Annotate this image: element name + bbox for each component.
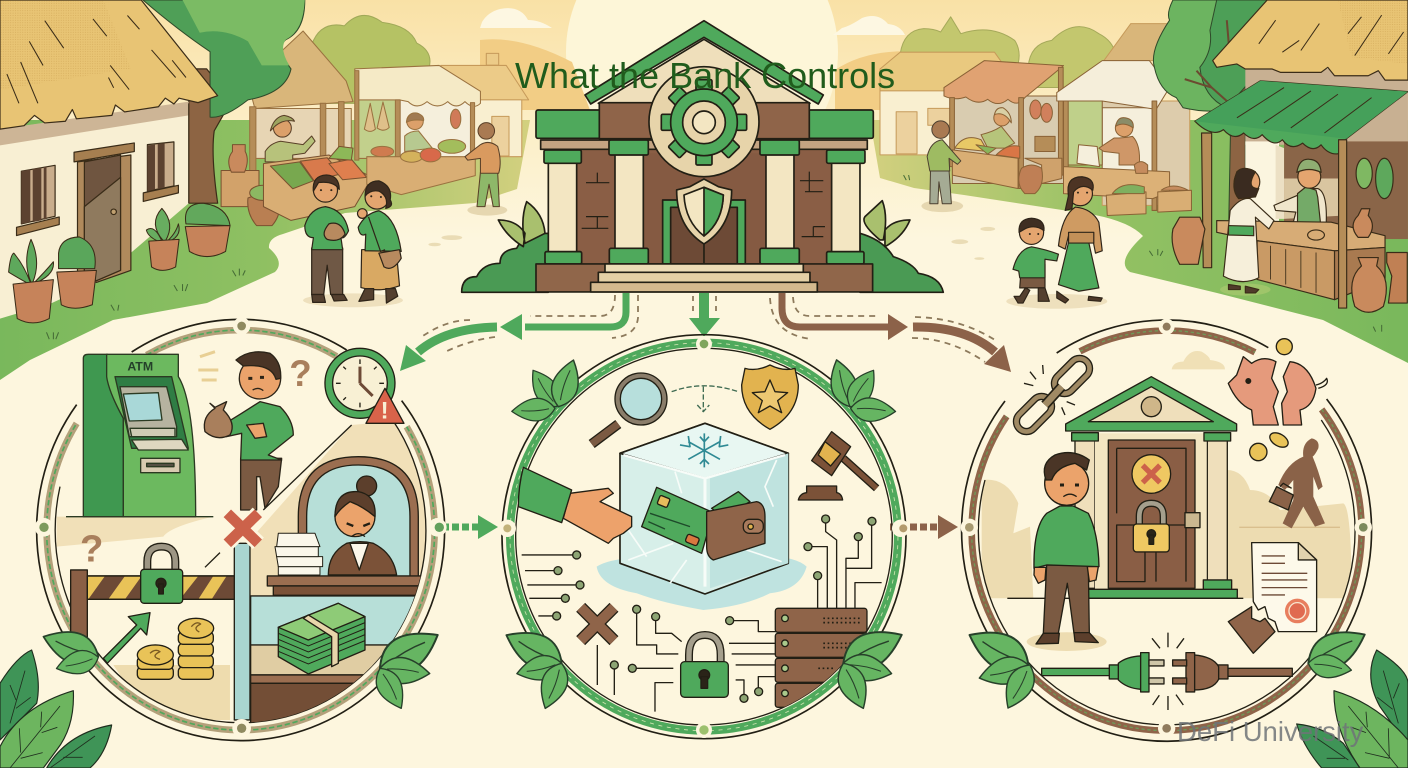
right village [880, 0, 1408, 332]
leaves bottom left [0, 650, 112, 768]
grass tufts right [904, 175, 1382, 332]
arrow: bank to centre panel [689, 293, 720, 337]
bushes and leaves [462, 201, 943, 292]
growth arrow [103, 613, 150, 663]
left tree trunk [189, 69, 245, 203]
clock with warning: ! [381, 397, 389, 424]
walking silhouette [1278, 438, 1325, 528]
panel 2 frame [502, 335, 906, 739]
leaves bottom right [1297, 650, 1408, 768]
pediment [598, 39, 810, 103]
walls and frieze [577, 148, 833, 265]
path pebbles left [428, 235, 462, 246]
distant trees right [900, 17, 1116, 88]
column capitals and bases [544, 140, 865, 264]
lawn right [870, 120, 1408, 363]
bank card [642, 487, 713, 553]
vendor in green vest [1274, 189, 1326, 226]
panel 2 leaves [499, 356, 909, 714]
panel 3 backdrop [982, 470, 1352, 598]
gear medallion [649, 67, 759, 177]
dashed pointer [672, 386, 738, 412]
briefcase [1269, 483, 1293, 510]
arrow: left panel to centre panel [432, 515, 498, 539]
lawn left [0, 120, 530, 380]
tree canopy left [143, 0, 305, 117]
left house [0, 0, 218, 319]
panel 3 nodes [961, 319, 1372, 737]
padlock [681, 635, 728, 697]
family walking [1006, 177, 1107, 309]
arrow: centre panel to right panel [890, 515, 958, 539]
distant house right [880, 24, 1190, 205]
panel: frozen account [499, 335, 909, 739]
broken chain [1012, 354, 1094, 436]
lower circuit lines [597, 605, 777, 712]
orange awning stall [944, 61, 1064, 194]
cracks [628, 460, 782, 583]
cream tent stall [1057, 61, 1191, 215]
produce boxes [263, 146, 372, 220]
question mark by customer: ? [289, 353, 312, 394]
panel 1 inner rim [55, 420, 426, 723]
torn document [1228, 543, 1317, 653]
ice cube [620, 423, 788, 594]
barrier with padlock [71, 547, 234, 643]
left circuit lines [522, 551, 584, 620]
background sky and road [31, 0, 1328, 200]
question mark by barrier: ? [80, 528, 103, 571]
small cloud [1172, 351, 1225, 369]
door [663, 200, 745, 264]
green awning stall [1172, 81, 1408, 312]
panel 3 leaves [962, 620, 1372, 714]
brown X [581, 607, 614, 641]
panel 1 nodes [35, 317, 447, 738]
pot and crate [221, 145, 280, 226]
clock with warning [325, 348, 404, 424]
distant house left [441, 53, 529, 157]
red X [205, 513, 258, 567]
panel 3 frame [962, 320, 1372, 741]
tree right [1153, 0, 1277, 236]
shield [677, 179, 732, 244]
clay pots right [1172, 217, 1205, 264]
potted plants left [9, 203, 230, 323]
hanging greens [1356, 158, 1393, 199]
central bank building [462, 21, 943, 292]
left village [0, 0, 529, 339]
unplugged cable [1042, 633, 1292, 710]
thatched stall [248, 31, 353, 189]
flow arrows from the bank [400, 293, 1011, 539]
divider post [234, 543, 250, 720]
stack of papers [275, 533, 323, 575]
counter and cash case [251, 576, 427, 723]
motion marks [198, 352, 218, 380]
entablature [541, 140, 867, 149]
sad man [1027, 453, 1107, 651]
title: What the Bank Controls [515, 55, 895, 96]
server rack [775, 608, 867, 707]
broken piggy bank [1228, 339, 1327, 461]
right house thatch and wall [1213, 0, 1408, 145]
cream awning stall [355, 65, 480, 195]
ATM machine: ATM [127, 360, 153, 374]
coin stacks [137, 618, 214, 679]
arrow: bank to left panel [400, 293, 638, 371]
panel: cash access limits [35, 317, 447, 741]
awning [1195, 81, 1408, 154]
steps and plinth [536, 264, 873, 292]
couple with money bag [303, 175, 403, 307]
windows [21, 165, 55, 224]
ATM machine [66, 354, 213, 517]
badge [742, 365, 798, 429]
columns [548, 154, 860, 252]
customer at stall [465, 123, 507, 216]
snowflake [680, 433, 728, 467]
puddle [597, 555, 807, 610]
customer in white robe [1220, 284, 1271, 296]
grass tufts left [46, 269, 245, 339]
panel 1 frame [37, 319, 445, 741]
upper circuit lines [804, 515, 882, 608]
panel 1 leaves [38, 620, 446, 714]
panel 2 nodes [499, 336, 909, 738]
watermark: DeFi University [1177, 716, 1364, 747]
customer right [921, 121, 963, 212]
wallet [707, 492, 765, 560]
corner leaves [0, 650, 1408, 768]
vendor with hat [265, 115, 315, 162]
panel 1 scene [56, 424, 426, 720]
distant tree left [312, 15, 430, 103]
bank teller [298, 457, 418, 577]
door [77, 155, 131, 282]
reaching hand [518, 467, 632, 543]
arrow: bank to right panel [770, 293, 1011, 372]
confused customer [204, 352, 293, 510]
gavel [798, 432, 877, 500]
panel: locked out of the bank [961, 319, 1372, 741]
path pebbles right [951, 227, 995, 260]
small locked bank [1007, 377, 1243, 598]
counter [1217, 221, 1385, 251]
magnifying glass [592, 373, 667, 444]
